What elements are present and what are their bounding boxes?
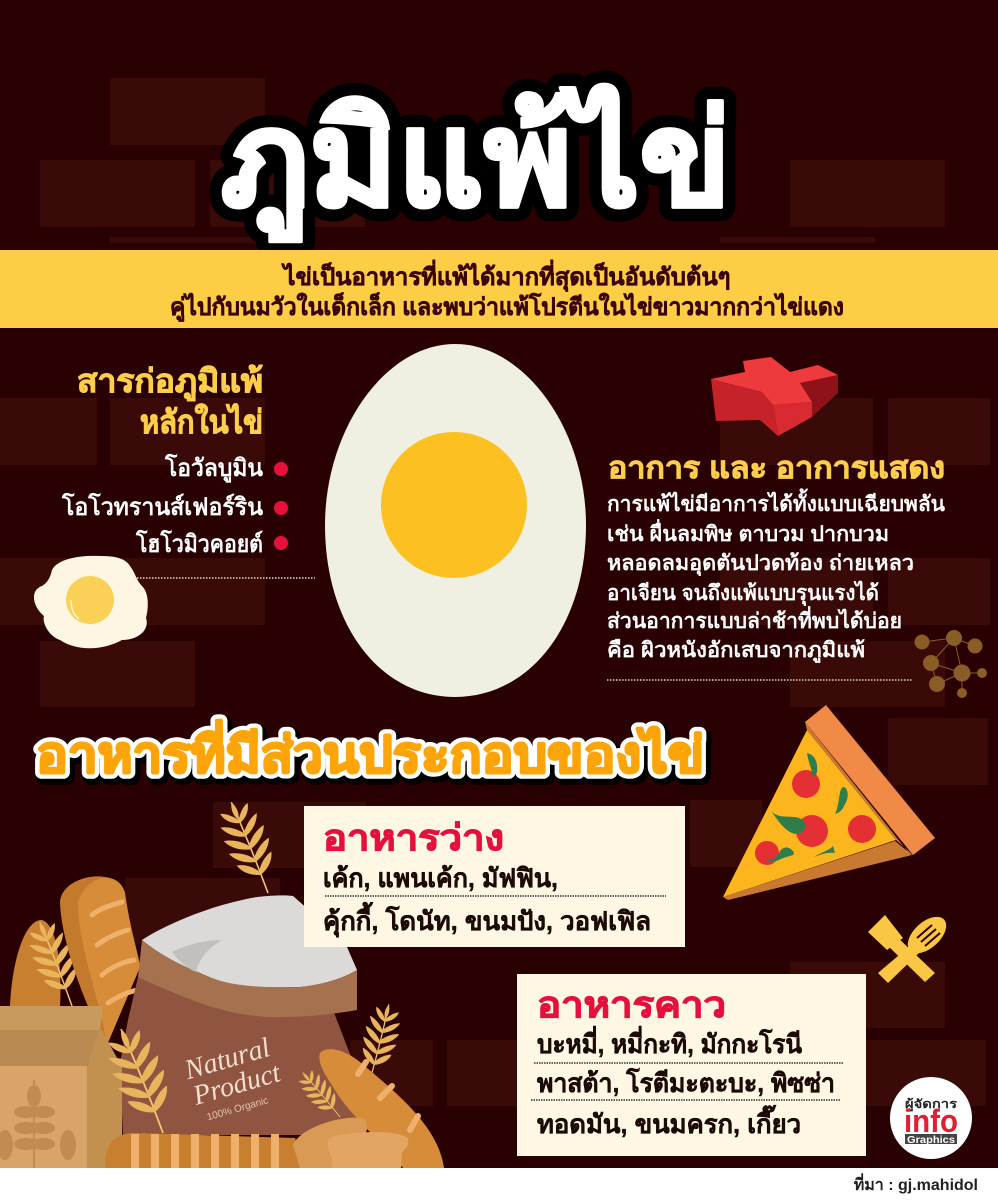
panel: snacks	[304, 806, 685, 947]
icon: wheat sack small	[298, 1070, 340, 1118]
heading: savoury: อาหารคาว	[537, 984, 726, 1025]
heading: foods containing egg: อาหารที่มีส่วนประกอบของไข่	[36, 720, 704, 783]
symptoms text: การแพ้ไข่มีอาการได้ทั้งแบบเฉียบพลัน	[607, 488, 946, 516]
icon: red cross	[711, 357, 838, 436]
intro banner	[0, 250, 998, 328]
icon: paper bag	[0, 1006, 122, 1168]
icon: flour sack	[120, 895, 360, 1135]
icon: wheat sack right	[362, 1004, 400, 1073]
icon: spatula and spoon	[868, 910, 953, 983]
intro banner: ไข่เป็นอาหารที่แพ้ได้มากที่สุดเป็นอันดับต้นๆ	[281, 259, 730, 293]
savoury list: พาสต้า, โรตีมะตะบะ, พิซซ่า	[537, 1067, 835, 1098]
heading: snacks: อาหารว่าง	[323, 817, 504, 858]
allergen list: โอโวทรานส์เฟอร์ริน	[61, 492, 264, 521]
intro banner: คู่ไปกับนมวัวในเด็กเล็ก และพบว่าแพ้โปรตีนในไข่ขาวมากกว่าไข่แดง	[170, 292, 844, 322]
heading: foods containing egg: อาหารที่มีส่วนประกอบของไข่	[39, 724, 707, 787]
icon: tall loaf	[60, 876, 140, 1045]
illustration: bakery and flour sack	[0, 794, 444, 1168]
title: ภูมิแพ้ไข่	[221, 84, 731, 242]
logo: info	[904, 1103, 958, 1139]
sack label: 100% Organic	[206, 1095, 270, 1123]
symptoms text: หลอดลมอุดตันปวดท้อง ถ่ายเหลว	[607, 551, 914, 577]
icon: pizza slice	[723, 705, 935, 900]
icon: wheat over sack	[108, 1028, 167, 1134]
symptoms text: อาเจียน จนถึงแพ้แบบรุนแรงได้	[607, 580, 879, 607]
heading: main allergens	[77, 363, 263, 440]
heading: main allergens: หลักในไข่	[140, 403, 263, 440]
source: ที่มา : gj.mahidol	[854, 1173, 978, 1194]
snacks list	[323, 863, 651, 938]
logo: ผู้จัดการ	[905, 1097, 958, 1112]
icon: bread slices	[293, 1118, 408, 1168]
logo: Graphics	[907, 1135, 955, 1146]
allergen list: โอวัลบูมิน	[164, 453, 264, 483]
icon: bottom baguette	[105, 1133, 305, 1168]
allergen list: โฮโวมิวคอยต์	[135, 529, 263, 558]
sack label: Product	[189, 1057, 285, 1112]
icon: fried egg	[34, 556, 148, 648]
savoury list	[537, 1025, 835, 1139]
snacks list: เค้ก, แพนเค้ก, มัฟฟิน,	[323, 863, 558, 893]
icon: wheat left	[30, 922, 76, 1006]
panel: savoury	[517, 974, 866, 1156]
sack label: Natural	[180, 1032, 274, 1086]
panel: symptoms	[607, 452, 946, 680]
icon: molecule	[914, 630, 987, 698]
icon: boiled egg	[325, 344, 586, 697]
icon: back loaf	[10, 920, 60, 1006]
allergen list	[61, 453, 288, 558]
heading: main allergens: สารก่อภูมิแพ้	[77, 363, 263, 402]
savoury list: ทอดมัน, ขนมครก, เกี๊ยว	[537, 1105, 801, 1139]
sack label	[186, 1036, 281, 1120]
heading: symptoms: อาการ และ อาการแสดง	[608, 452, 945, 485]
icon: wheat top	[220, 802, 272, 894]
symptoms text: ส่วนอาการแบบล่าช้าที่พบได้บ่อย	[607, 605, 902, 633]
savoury list: บะหมี่, หมี่กะทิ, มักกะโรนี	[537, 1025, 802, 1059]
title: ภูมิแพ้ไข่	[221, 84, 731, 242]
symptoms text: เช่น ผื่นลมพิษ ตาบวม ปากบวม	[607, 518, 889, 546]
symptoms text: คือ ผิวหนังอักเสบจากภูมิแพ้	[607, 638, 865, 664]
panel: main allergens	[61, 363, 315, 578]
icon: right baguette	[319, 1049, 444, 1168]
snacks list: คุ้กกี้, โดนัท, ขนมปัง, วอฟเฟิล	[323, 901, 651, 938]
logo	[890, 1077, 972, 1159]
symptoms text	[607, 488, 946, 664]
heading: foods containing egg: อาหารที่มีส่วนประกอบของไข่	[36, 720, 704, 783]
